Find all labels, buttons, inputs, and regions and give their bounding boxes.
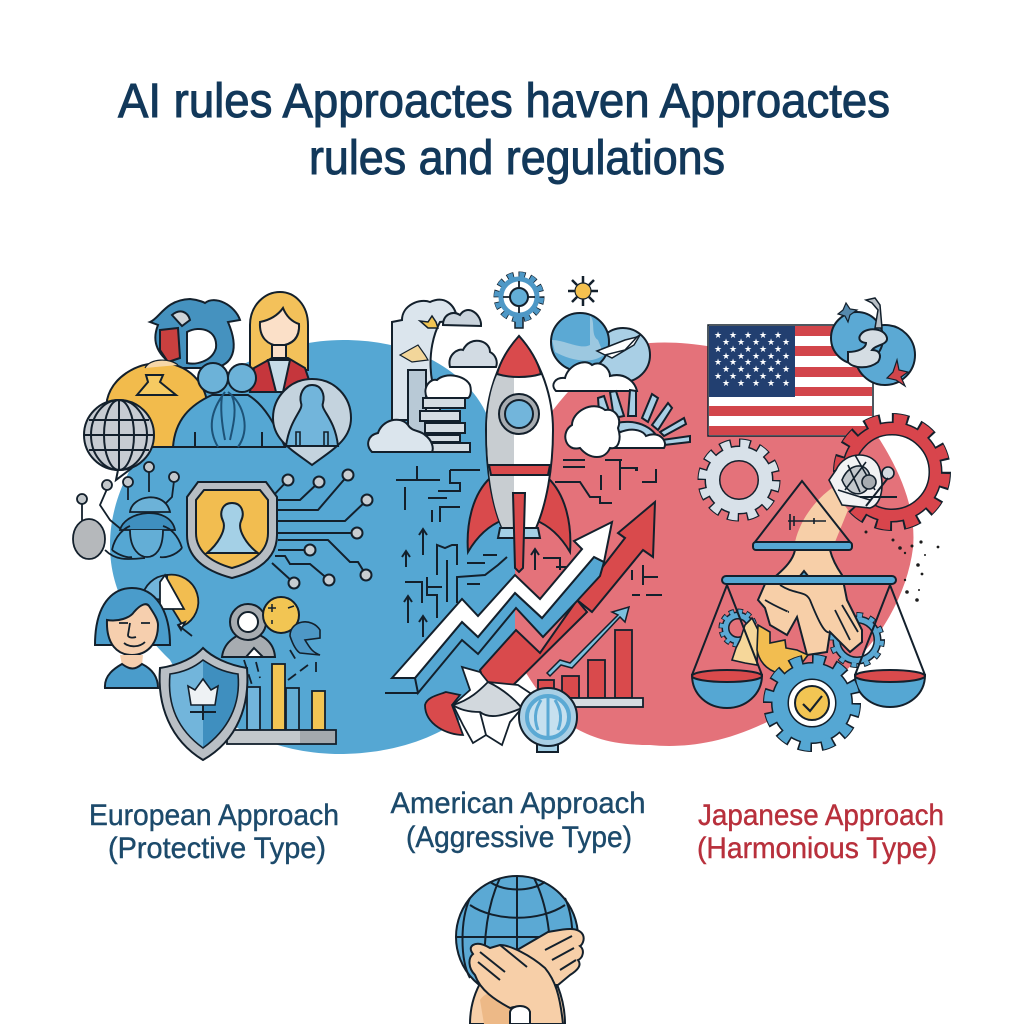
icon: rocket xyxy=(468,336,570,572)
panel: red background circle xyxy=(515,342,913,746)
dots scatter xyxy=(864,530,939,602)
icon: magnifier person with coins xyxy=(222,597,320,657)
icon: white gear xyxy=(702,444,776,516)
icon: american flag: ★★★★★ xyxy=(722,337,790,347)
icon: blue protective shield xyxy=(160,648,247,760)
text block: american approach: (Aggressive Type) xyxy=(406,821,632,854)
bar chart: american xyxy=(538,607,643,707)
icon: gold shield with person xyxy=(187,482,277,578)
icon: sun xyxy=(568,276,598,306)
icon: central blue figure with two heads xyxy=(173,363,285,447)
icon: american flag: ★★★★★ xyxy=(714,357,782,367)
european cluster: people and globe xyxy=(84,292,351,480)
icon: skyscrapers and clouds xyxy=(368,300,497,452)
icon: woman with blue hair xyxy=(95,588,170,688)
icon: twin blue profile heads xyxy=(150,299,240,368)
icon: globe held by hands xyxy=(456,876,584,1024)
icon: yellow figure xyxy=(107,360,207,447)
text block: european approach xyxy=(89,799,339,865)
icon: person badge xyxy=(273,379,351,465)
bar chart: european xyxy=(227,650,336,744)
icon: blue dial xyxy=(519,688,577,752)
icon: pie with cursor xyxy=(142,575,198,636)
text block: european approach: European Approach xyxy=(89,799,339,832)
icon: red growth arrow xyxy=(480,502,655,706)
title: AI rules Approactes haven Approactes xyxy=(118,75,890,128)
chart arrows: american xyxy=(385,502,655,706)
icon: blue gear with check xyxy=(769,660,855,746)
text block: japanese approach xyxy=(697,799,944,865)
icon: earth with clouds xyxy=(551,313,650,391)
white corner behind woman xyxy=(100,600,170,700)
icon: gear target xyxy=(497,275,541,328)
text block: japanese approach: Japanese Approach xyxy=(698,799,944,832)
icon: woman with blonde hair xyxy=(250,292,313,392)
panel: blue background circle xyxy=(110,340,515,754)
icon: globe with star xyxy=(831,298,915,386)
text block: european approach: (Protective Type) xyxy=(108,832,326,865)
icon: crumpled paper xyxy=(425,667,533,745)
icon: american flag: ★★★★★ xyxy=(714,371,782,381)
icon: blue growth arrow xyxy=(415,557,604,693)
icon: mechanical knot xyxy=(829,455,897,508)
maze lines: american xyxy=(396,460,662,637)
icon: small gears behind hands xyxy=(722,612,882,665)
icon: american flag: ★★★★★ xyxy=(722,351,790,361)
icon: clasped hands xyxy=(732,550,862,675)
icon: triangle with arm xyxy=(753,481,852,550)
icon: globe xyxy=(84,400,154,480)
icon: american flag: ★★★★★ xyxy=(714,344,782,354)
icon: large red gear xyxy=(839,419,945,525)
icon: balance scale xyxy=(692,571,925,708)
circuit lines from shield xyxy=(272,470,372,588)
icon: american flag: ★★★★★ xyxy=(714,330,782,340)
icon: cloud with sun xyxy=(565,390,690,457)
icon: robot head with headset xyxy=(73,462,182,559)
text block: american approach: American Approach xyxy=(390,787,646,820)
title xyxy=(118,75,890,185)
text block: japanese approach: (Harmonious Type) xyxy=(697,832,937,865)
icon: american flag: ★★★★★ xyxy=(722,378,790,388)
title: rules and regulations xyxy=(309,132,725,185)
text block: american approach xyxy=(390,787,646,854)
icon: white growth arrow xyxy=(392,522,612,678)
icon: american flag xyxy=(708,325,873,436)
icon: american flag: ★★★★★ xyxy=(722,364,790,374)
